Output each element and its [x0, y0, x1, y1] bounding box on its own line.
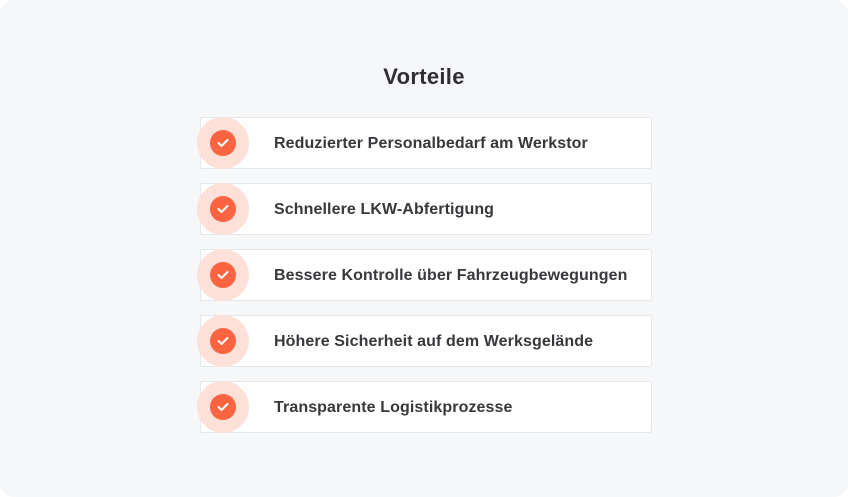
item 1: Reduzierter Personalbedarf am Werkstor: [274, 135, 588, 152]
item 4: [197, 315, 652, 367]
item 2: Schnellere LKW-Abfertigung: [274, 201, 494, 218]
item 3: [197, 249, 652, 301]
title: Vorteile: [383, 64, 465, 89]
item 4: Höhere Sicherheit auf dem Werksgelände: [274, 333, 593, 350]
item 5: Transparente Logistikprozesse: [274, 399, 513, 416]
item 5: [197, 381, 652, 433]
item 2: [197, 183, 652, 235]
item 3: Bessere Kontrolle über Fahrzeugbewegungen: [274, 267, 628, 284]
item 1: [197, 117, 652, 169]
